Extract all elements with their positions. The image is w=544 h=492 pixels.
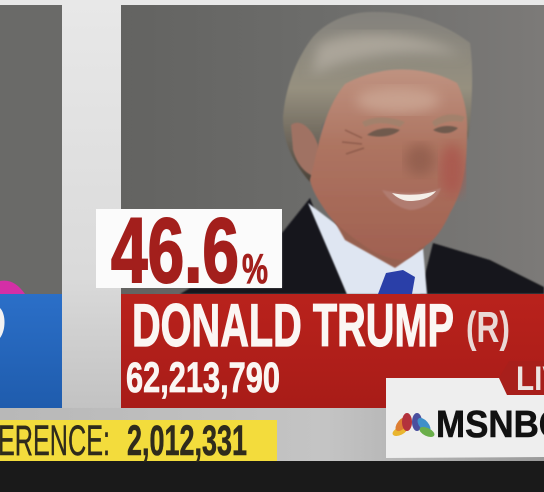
forehead highlight xyxy=(356,87,440,113)
nose xyxy=(405,144,435,176)
right eyebrow xyxy=(432,114,465,127)
difference label: ERENCE: xyxy=(0,417,110,465)
hair xyxy=(283,12,472,182)
vote count: 62,213,790 xyxy=(126,354,280,402)
difference banner xyxy=(0,417,277,465)
party label: (R) xyxy=(466,303,510,352)
right eye xyxy=(433,126,458,133)
percentage value: 46.6 xyxy=(111,200,239,302)
teeth xyxy=(392,191,436,201)
live tab xyxy=(499,360,544,398)
panel: left candidate photo background xyxy=(0,5,62,294)
percent sign: % xyxy=(242,245,268,292)
face xyxy=(310,70,467,260)
left candidate clothing xyxy=(0,281,25,294)
crow's feet wrinkles xyxy=(342,130,364,154)
lower grey strip xyxy=(0,408,544,461)
hair highlight xyxy=(312,34,462,75)
panel: Trump photo background xyxy=(121,5,544,294)
neck xyxy=(325,205,440,268)
panel: Trump red bar xyxy=(121,292,544,408)
right cheek shading xyxy=(440,144,464,196)
suit jacket xyxy=(180,198,544,294)
difference value: 2,012,331 xyxy=(127,417,247,465)
mouth xyxy=(382,188,441,210)
shirt collar xyxy=(308,203,427,294)
portrait: Donald Trump xyxy=(180,12,544,294)
left eye xyxy=(367,128,400,137)
percentage box xyxy=(96,200,282,302)
ear xyxy=(291,123,321,177)
panel: left candidate blue bar xyxy=(0,294,62,408)
MSNBC logo box xyxy=(386,378,544,458)
icon: NBC peacock xyxy=(391,413,436,439)
tie xyxy=(378,270,415,294)
left eyebrow xyxy=(362,117,405,127)
